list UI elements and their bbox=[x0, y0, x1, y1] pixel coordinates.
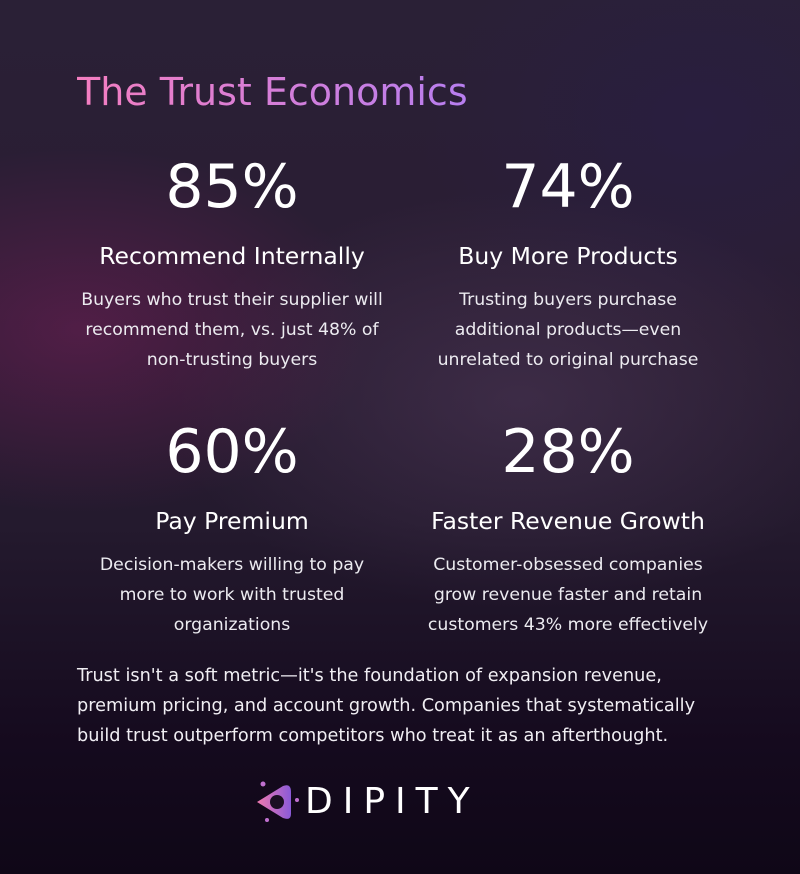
heading: Recommend Internally bbox=[99, 242, 365, 270]
summary paragraph: Trust isn't a soft metric—it's the foundation of expansion revenue, bbox=[77, 666, 662, 686]
heading: Pay Premium bbox=[155, 507, 309, 535]
stat: recommend internally bbox=[81, 152, 383, 370]
stat: buy more products bbox=[438, 152, 698, 370]
stat: faster revenue growth bbox=[428, 417, 708, 635]
number 28%: 28% bbox=[501, 417, 635, 487]
description: grow revenue faster and retain bbox=[434, 585, 702, 605]
heading: Buy More Products bbox=[458, 242, 678, 270]
number 74%: 74% bbox=[501, 152, 635, 222]
description: customers 43% more effectively bbox=[428, 615, 708, 635]
description: more to work with trusted bbox=[120, 585, 344, 605]
number 85%: 85% bbox=[165, 152, 299, 222]
logo text: DIPITY bbox=[305, 781, 480, 822]
title: The Trust Economics bbox=[77, 70, 468, 114]
description bbox=[428, 555, 708, 635]
description: Customer-obsessed companies bbox=[433, 555, 703, 575]
description bbox=[81, 290, 383, 370]
description: Trusting buyers purchase bbox=[459, 290, 677, 310]
description bbox=[100, 555, 364, 635]
summary paragraph: premium pricing, and account growth. Companies that systematically bbox=[77, 696, 695, 716]
logo icon bbox=[257, 782, 299, 822]
heading: Faster Revenue Growth bbox=[431, 507, 705, 535]
description: additional products—even bbox=[455, 320, 681, 340]
summary paragraph: build trust outperform competitors who treat it as an afterthought. bbox=[77, 726, 668, 746]
description: non-trusting buyers bbox=[147, 350, 317, 370]
description bbox=[438, 290, 698, 370]
summary paragraph bbox=[76, 666, 695, 746]
stat: pay premium bbox=[100, 417, 364, 635]
number 60%: 60% bbox=[165, 417, 299, 487]
description: Decision-makers willing to pay bbox=[100, 555, 364, 575]
description: organizations bbox=[174, 615, 290, 635]
description: unrelated to original purchase bbox=[438, 350, 698, 370]
description: recommend them, vs. just 48% of bbox=[85, 320, 379, 340]
description: Buyers who trust their supplier will bbox=[81, 290, 383, 310]
logo: DIPITY bbox=[257, 781, 480, 822]
